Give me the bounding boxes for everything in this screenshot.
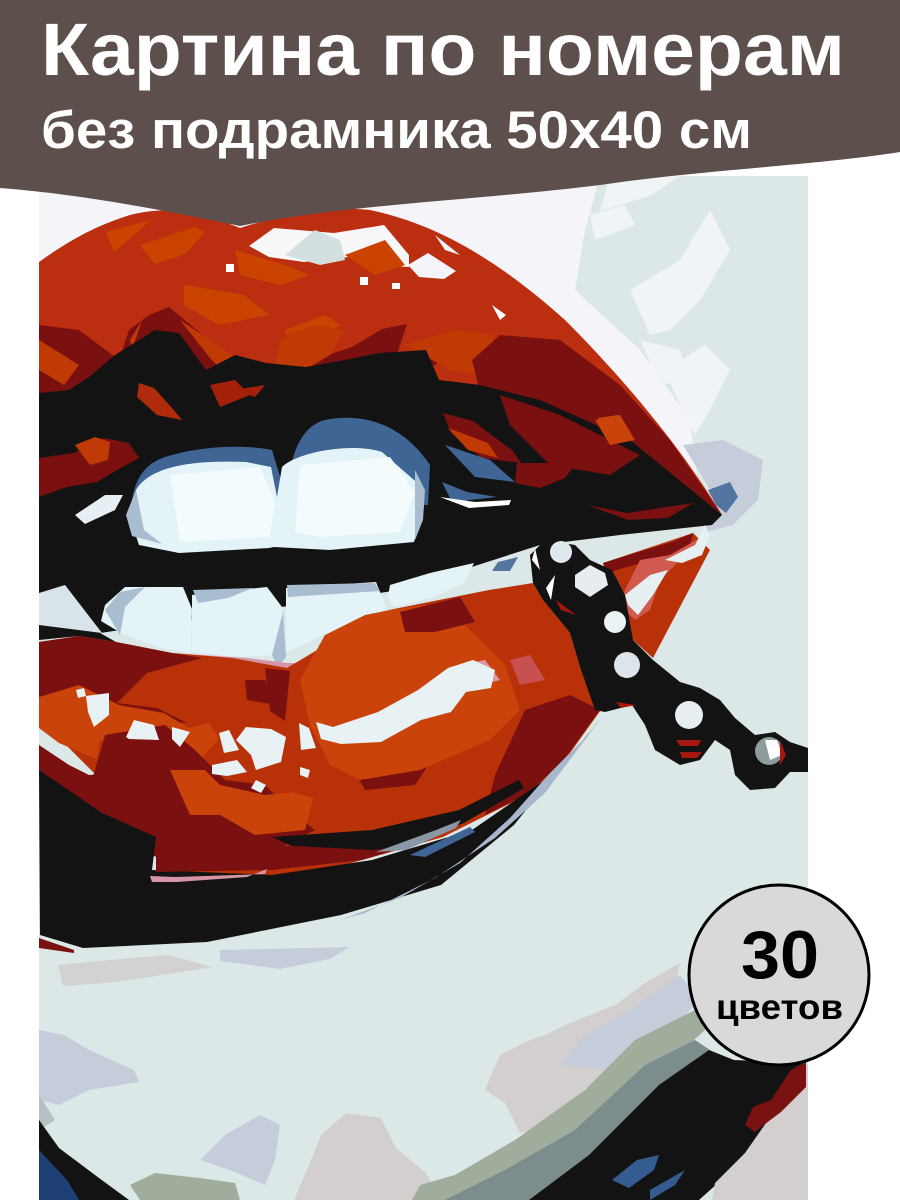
- upper teeth: [126, 418, 430, 553]
- jaw shadow: [39, 715, 604, 953]
- badge: 30 colours: [689, 885, 869, 1065]
- badge: 30 colours: цветов: [716, 988, 843, 1027]
- subtitle: без подрамника 50х40 см: [41, 101, 752, 160]
- side tooth and lower small tooth: [75, 495, 518, 607]
- mouth interior: [39, 330, 722, 642]
- pearl chain: [530, 540, 808, 790]
- title: Картина по номерам: [41, 8, 845, 91]
- lower lip: [39, 583, 603, 882]
- upper lip: [39, 209, 722, 515]
- painting: [39, 176, 808, 1200]
- header band: [0, 0, 900, 226]
- right lip corner: [603, 525, 710, 658]
- lower teeth: [39, 582, 386, 675]
- badge: 30 colours: 30: [741, 917, 819, 993]
- painting background: [39, 176, 808, 1200]
